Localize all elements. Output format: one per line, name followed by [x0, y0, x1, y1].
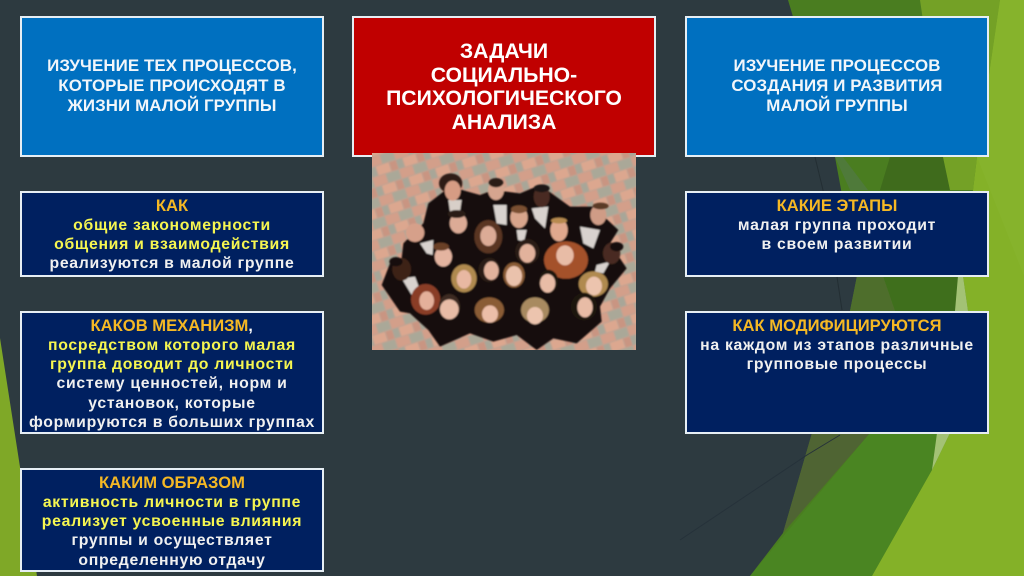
panel: how are modified: на каждом из этапов различные — [700, 337, 974, 354]
panel: title — [352, 16, 656, 157]
panel: study of creation and development — [685, 16, 989, 157]
panel: in what way: активность личности в группе — [43, 494, 301, 511]
panel: what mechanism: систему ценностей, норм и — [56, 375, 287, 392]
panel: what stages — [685, 191, 989, 277]
panel: what mechanism: КАКОВ МЕХАНИЗМ, — [91, 316, 253, 335]
panel: in what way: реализует усвоенные влияния — [42, 513, 302, 530]
panel: in what way: группы и осуществляет — [71, 532, 273, 549]
panel: what mechanism — [20, 311, 324, 434]
panel: how are modified — [685, 311, 989, 434]
panel: in what way — [20, 468, 324, 572]
panel: how general regularities: общие закономерности — [73, 217, 271, 234]
panel: how general regularities: КАК — [156, 196, 188, 215]
panel: in what way: КАКИМ ОБРАЗОМ — [99, 473, 245, 492]
panel: in what way: определенную отдачу — [78, 552, 266, 569]
panel: what stages: в своем развитии — [762, 236, 912, 253]
panel: title: СОЦИАЛЬНО- — [431, 64, 577, 87]
panel: title: ЗАДАЧИ — [460, 40, 548, 63]
panel: title: ПСИХОЛОГИЧЕСКОГО — [386, 87, 622, 110]
panel: study of processes in small group: ЖИЗНИ МАЛОЙ ГРУППЫ — [67, 96, 277, 115]
photo: group of people seen from above — [372, 153, 636, 350]
panel: how general regularities: реализуются в малой группе — [49, 255, 295, 272]
panel: how general regularities: общения и взаимодействия — [54, 236, 290, 253]
panel: how are modified: групповые процессы — [747, 356, 927, 373]
panel: what mechanism: посредством которого малая — [48, 337, 296, 354]
panel: study of processes in small group — [20, 16, 324, 157]
panel: how are modified: КАК МОДИФИЦИРУЮТСЯ — [732, 316, 942, 335]
panel: title: АНАЛИЗА — [452, 111, 556, 134]
panel: what stages: малая группа проходит — [738, 217, 936, 234]
panel: study of creation and development: СОЗДАНИЯ И РАЗВИТИЯ — [731, 76, 943, 95]
panel: study of processes in small group: КОТОРЫЕ ПРОИСХОДЯТ В — [58, 76, 286, 95]
panel: what stages: КАКИЕ ЭТАПЫ — [777, 196, 897, 215]
panel: what mechanism: группа доводит до личности — [50, 356, 294, 373]
panel: what mechanism: формируются в больших группах — [29, 414, 315, 431]
panel: how general regularities — [20, 191, 324, 277]
panel: what mechanism: установок, которые — [88, 395, 256, 412]
panel: study of creation and development: ИЗУЧЕНИЕ ПРОЦЕССОВ — [733, 56, 941, 75]
panel: study of creation and development: МАЛОЙ ГРУППЫ — [766, 96, 908, 115]
panel: study of processes in small group: ИЗУЧЕНИЕ ТЕХ ПРОЦЕССОВ, — [47, 56, 297, 75]
